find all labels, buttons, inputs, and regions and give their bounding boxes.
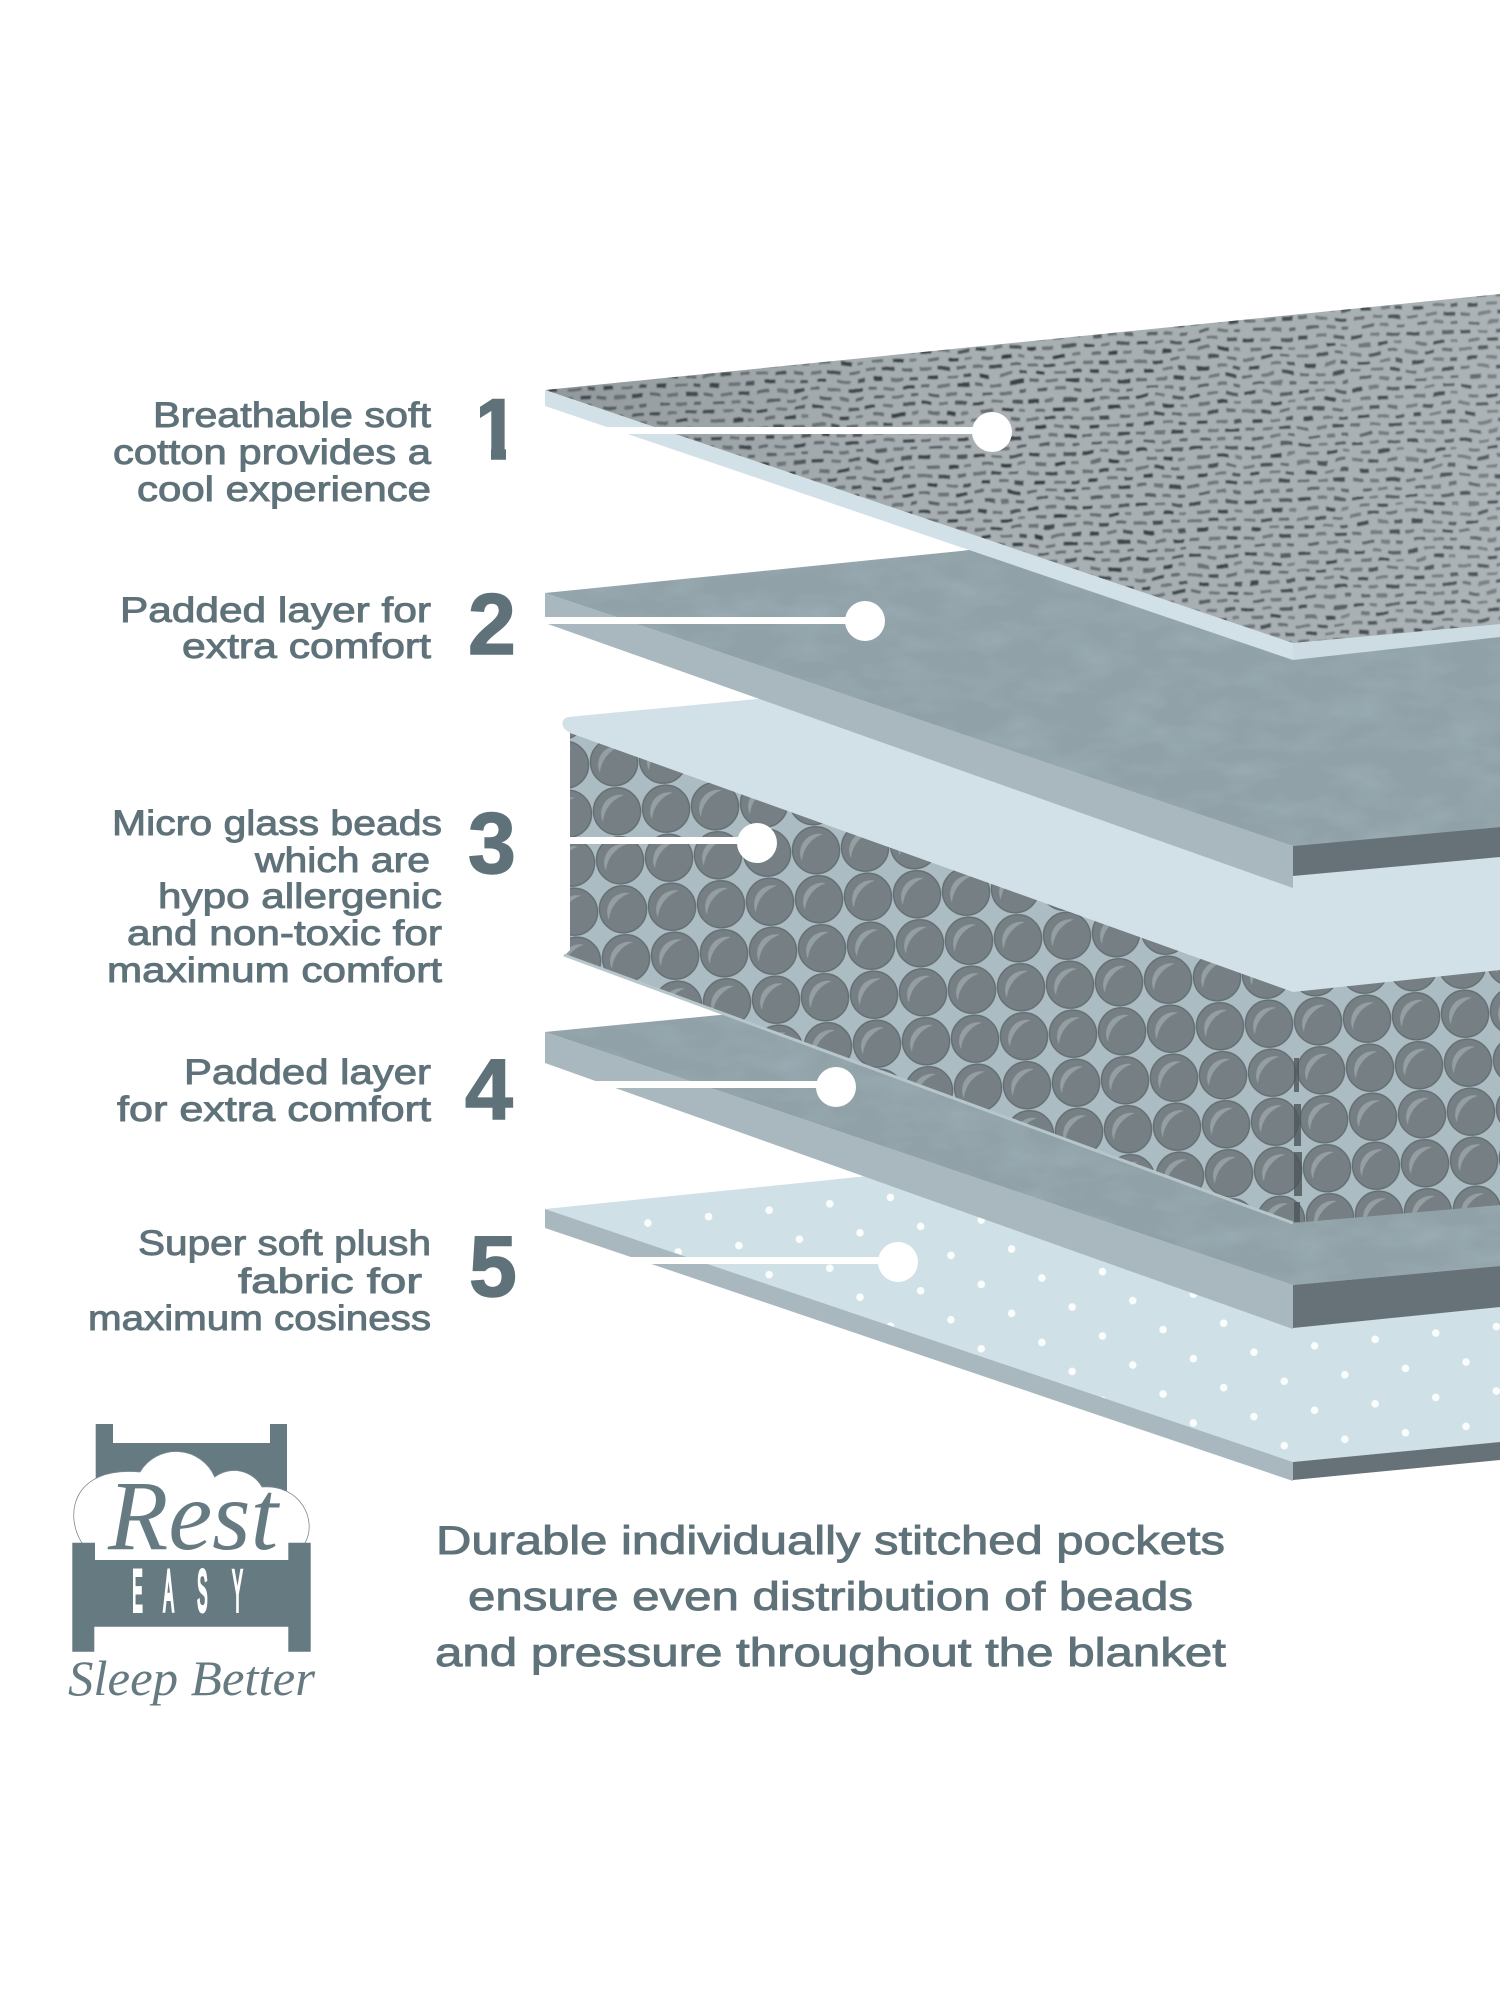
label 3 text: which are xyxy=(254,841,430,880)
layer 2: padded layer xyxy=(545,480,1500,888)
label 4 text xyxy=(117,1053,431,1129)
layer 1: breathable cotton xyxy=(545,294,1500,660)
logo cloud xyxy=(74,1452,309,1570)
label 1 text: cool experience xyxy=(137,470,431,509)
label 5 text: fabric for xyxy=(238,1262,422,1301)
callout 1: line and dot xyxy=(560,412,1012,452)
logo tagline Sleep Better: Sleep Better xyxy=(68,1650,316,1706)
label 1 text: Breathable soft xyxy=(153,396,431,435)
bottom description text: ensure even distribution of beads xyxy=(468,1575,1193,1619)
number 5: 5 xyxy=(469,1219,517,1315)
logo word EASY: S xyxy=(197,1560,208,1625)
label 1 text: cotton provides a xyxy=(113,433,432,472)
label 3 text: Micro glass beads xyxy=(112,804,442,843)
layer 5: plush fabric xyxy=(545,1100,1500,1481)
bottom description text: and pressure throughout the blanket xyxy=(435,1631,1226,1675)
logo word EASY xyxy=(132,1560,243,1625)
label 1 text xyxy=(113,396,432,509)
callout 4: line and dot xyxy=(545,1067,856,1107)
callout 5: line and dot xyxy=(545,1242,918,1282)
label 3 text: and non-toxic for xyxy=(127,914,442,953)
logo word EASY: E xyxy=(132,1560,143,1625)
label 3 text xyxy=(107,804,442,990)
bottom description text: Durable individually stitched pockets xyxy=(436,1519,1225,1563)
label 3 text: maximum comfort xyxy=(107,951,442,990)
logo word EASY: A xyxy=(163,1560,174,1625)
logo word EASY: Y xyxy=(232,1560,243,1625)
fold shading xyxy=(1294,1058,1302,1222)
callout 2: line and dot xyxy=(545,601,885,641)
label 2 text xyxy=(120,591,431,666)
label 4 text: Padded layer xyxy=(184,1053,431,1092)
number 2: 2 xyxy=(468,577,516,673)
label 2 text: extra comfort xyxy=(182,627,431,666)
number 3: 3 xyxy=(468,796,516,892)
logo footboard xyxy=(72,1543,311,1652)
number 1: 1 xyxy=(472,382,520,478)
logo: Rest Easy Sleep Better xyxy=(68,1424,316,1706)
label 5 text: maximum cosiness xyxy=(88,1299,431,1338)
number 4: 4 xyxy=(465,1042,513,1138)
logo headboard xyxy=(96,1424,287,1500)
layer 3: micro glass beads xyxy=(562,620,1500,1223)
label 5 text: Super soft plush xyxy=(138,1224,431,1263)
bottom description text xyxy=(435,1519,1226,1675)
callout 3: line and dot xyxy=(570,823,777,863)
label 4 text: for extra comfort xyxy=(117,1090,431,1129)
label 2 text: Padded layer for xyxy=(120,591,431,630)
label 5 text xyxy=(88,1224,431,1338)
layer 4: padded layer xyxy=(545,900,1500,1329)
logo word Rest: Rest xyxy=(107,1460,280,1571)
label 3 text: hypo allergenic xyxy=(158,877,442,916)
